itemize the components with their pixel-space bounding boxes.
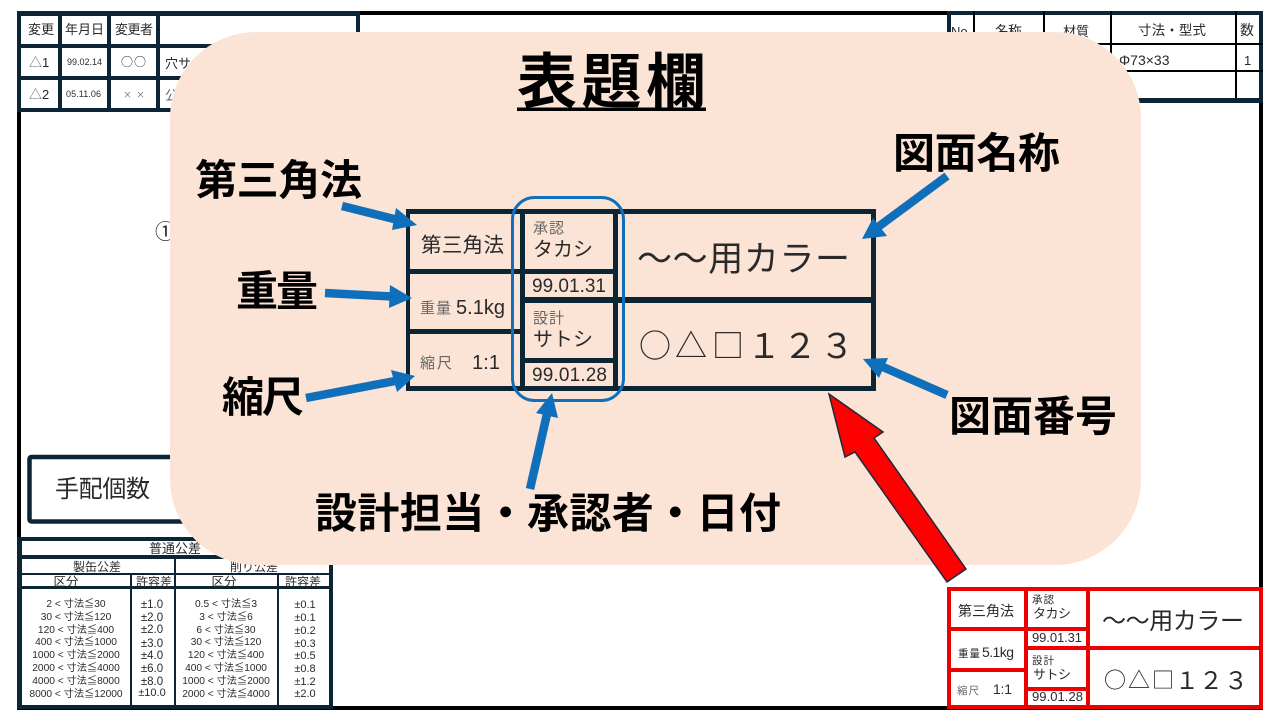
red block text: タカシ [1033, 603, 1071, 622]
tolerance table values [29, 597, 316, 700]
red block text: 設計 [1032, 653, 1054, 668]
red block text: 99.01.28 [1032, 689, 1083, 704]
revision table text: 年月日 [65, 19, 104, 38]
tolerance table values: ±0.3 [294, 638, 316, 650]
label: third-angle projection: 第三角法 [195, 147, 362, 208]
red block grid [947, 587, 1263, 709]
diagram text [420, 217, 854, 386]
tolerance table values: 30 < 寸法≦120 [41, 610, 112, 623]
parts list grid [947, 11, 1263, 103]
label: scale: 縮尺 [222, 364, 304, 425]
red block background [947, 587, 1263, 709]
panel: title block explanation [170, 32, 1141, 565]
revision table text: 1 [42, 55, 49, 70]
tolerance table values: ±0.2 [294, 625, 316, 637]
order quantity frame [30, 457, 250, 522]
tolerance table values: 120 < 寸法≦400 [38, 623, 114, 636]
diagram text: 第三角法 [421, 228, 504, 258]
tolerance table values: ±8.0 [141, 676, 163, 688]
tolerance table values: 0.5 < 寸法≦3 [195, 597, 257, 610]
diagram text: １２３ [747, 319, 854, 368]
tolerance table headings: 区分 [53, 571, 79, 590]
revision table text: ×× [123, 88, 145, 101]
red block text: ○△□ [1104, 663, 1174, 695]
red block text: 5.1kg [982, 644, 1014, 660]
diagram text: ～～用カラー [637, 231, 850, 282]
title block diagram [406, 209, 876, 391]
parts list text: 材質 [1063, 21, 1089, 40]
tolerance table values: 1000 < 寸法≦2000 [32, 648, 120, 661]
tolerance table values: ±3.0 [141, 638, 163, 650]
tolerance table headings: 区分 [211, 571, 237, 590]
diagram text: 99.01.31 [532, 276, 606, 297]
part number callout: ① [155, 216, 176, 246]
revision table text: 05.11.06 [66, 89, 101, 99]
red arrow to title block [829, 394, 966, 582]
tolerance table values: 120 < 寸法≦400 [188, 648, 264, 661]
red block text: 99.01.31 [1032, 630, 1082, 645]
tolerance table values: ±0.5 [294, 650, 316, 662]
label: weight: 重量 [236, 258, 318, 319]
title [517, 34, 706, 121]
tolerance table values: 30 < 寸法≦120 [191, 635, 262, 648]
tolerance table values: ±2.0 [141, 612, 163, 624]
arrow: drawing number [863, 358, 947, 395]
parts list table, top right [947, 11, 1263, 103]
red block text: サトシ [1033, 664, 1071, 683]
tolerance table values: ±1.0 [141, 599, 163, 611]
diagram text: タカシ [533, 233, 593, 262]
label: designer, approver, date: 設計担当・承認者・日付 [315, 480, 781, 541]
revision table text: 変更 [28, 19, 54, 38]
revision table text [28, 19, 191, 104]
tolerance table values: 3 < 寸法≦6 [199, 610, 253, 623]
revision table text: △ [29, 52, 42, 71]
tolerance table values: ±4.0 [141, 650, 163, 662]
tolerance table values: 4000 < 寸法≦8000 [32, 674, 120, 687]
tolerance table values: 6 < 寸法≦30 [196, 623, 256, 636]
tolerance table headings [53, 538, 321, 590]
label: drawing number: 図面番号 [949, 383, 1117, 444]
red block text: 1:1 [993, 681, 1012, 697]
diagram text: 縮尺 [420, 352, 452, 373]
tolerance table values: ±0.1 [294, 599, 316, 611]
red block text [957, 592, 1248, 704]
revision table text: 2 [42, 87, 49, 102]
diagram text: 重量 [420, 297, 451, 318]
red block text: １２３ [1175, 661, 1248, 696]
tolerance table values: ±0.1 [294, 612, 316, 624]
tolerance table values: ±6.0 [141, 663, 163, 675]
order quantity label: 手配個数 [55, 469, 150, 504]
tolerance table headings: 削り公差 [230, 558, 278, 575]
tolerance table values: 400 < 寸法≦1000 [35, 635, 117, 648]
tolerance table headings: 製缶公差 [73, 558, 121, 575]
tolerance table values: ±0.8 [294, 663, 316, 675]
title underline [517, 108, 706, 111]
parts list text: 数 [1240, 20, 1254, 40]
revision table text: 穴サ [165, 53, 191, 72]
diagram text: 承認 [533, 217, 564, 238]
red block text: 縮尺 [957, 683, 980, 698]
arrow: designer, approver, date [530, 393, 558, 489]
arrow: scale [306, 370, 415, 398]
diagram text: 設計 [533, 307, 564, 328]
revision table text: 99.02.14 [67, 57, 102, 67]
order quantity box [30, 457, 250, 522]
general tolerance table [17, 537, 333, 709]
red block text: 第三角法 [958, 601, 1014, 621]
revision table text: 変更者 [115, 19, 153, 38]
parts list text: 寸法・型式 [1138, 19, 1206, 39]
revision table text: ○○ [121, 53, 146, 70]
parts list text: Φ73×33 [1119, 52, 1170, 68]
tolerance table values: 1000 < 寸法≦2000 [182, 674, 270, 687]
title text: 表題欄 [517, 34, 706, 121]
parts list text: 名称 [995, 21, 1022, 41]
tolerance table headings: 許容差 [136, 573, 172, 590]
red block text: 承認 [1032, 592, 1054, 607]
arrow: weight [325, 285, 412, 308]
tolerance table values: ±2.0 [294, 688, 316, 700]
parts list text: No [951, 24, 968, 39]
revision table grid [17, 11, 360, 112]
parts list text [951, 19, 1254, 68]
tolerance table values: 2 < 寸法≦30 [46, 597, 106, 610]
diagram text: ○△□ [639, 321, 744, 367]
revision table text: 公 [165, 85, 178, 104]
parts list text: 1 [1244, 53, 1251, 68]
tolerance table values: ±1.2 [294, 676, 316, 688]
red block text: 重量 [958, 646, 980, 661]
tolerance table values: 2000 < 寸法≦4000 [182, 687, 270, 700]
tolerance table values: ±10.0 [138, 687, 166, 699]
diagram text: 5.1kg [456, 297, 505, 319]
arrow: third-angle projection [342, 206, 417, 230]
diagram grid [406, 209, 876, 391]
label: drawing name: 図面名称 [893, 120, 1060, 181]
arrow: drawing name [862, 176, 947, 239]
revision table text: △ [29, 84, 42, 103]
tolerance table values: ±2.0 [141, 624, 163, 636]
tolerance table headings: 許容差 [285, 573, 321, 590]
tolerance table grid [17, 537, 333, 709]
tolerance table values: 8000 < 寸法≦12000 [29, 687, 123, 700]
parts list inner lines [947, 11, 1263, 98]
diagram text: 1:1 [472, 352, 500, 374]
diagram text: サトシ [533, 323, 593, 352]
revision table, top left [17, 11, 360, 112]
tolerance table values: 400 < 寸法≦1000 [185, 661, 267, 674]
tolerance table values: 2000 < 寸法≦4000 [32, 661, 120, 674]
diagram text: 99.01.28 [532, 365, 607, 386]
title block highlighted in red, bottom right [947, 587, 1263, 709]
red block text: ～～用カラー [1102, 601, 1244, 636]
tolerance table headings: 普通公差 [149, 538, 201, 557]
highlight: designer and approver column [512, 198, 624, 400]
